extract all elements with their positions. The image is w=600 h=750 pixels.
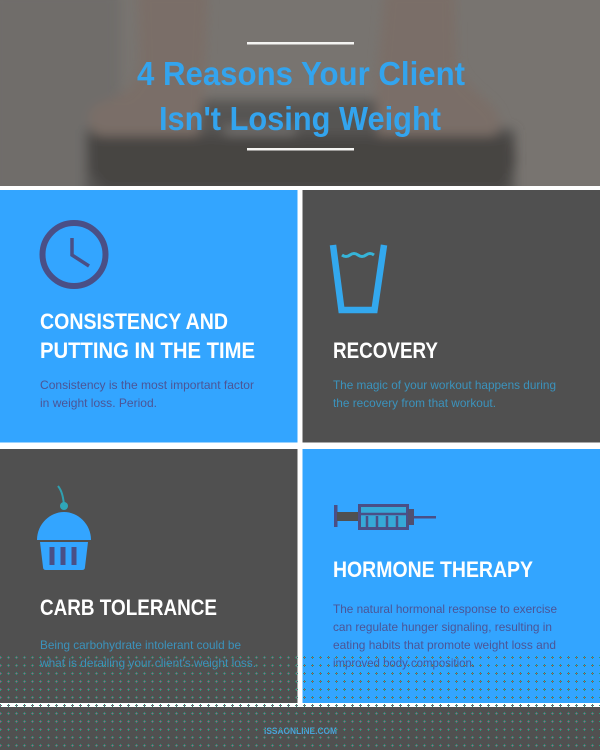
title: Isn't Losing Weight: [159, 100, 441, 137]
text: hormone body: eating habits that promote weight loss and: [333, 638, 556, 652]
panel: consistency: [0, 190, 298, 442]
icon: cupcake: [37, 486, 91, 570]
dot pattern overlay: [0, 656, 600, 750]
heading: consistency: CONSISTENCY AND: [40, 309, 228, 334]
text: hormone body: The natural hormonal response to exercise: [333, 602, 557, 616]
text: hormone body: [333, 602, 557, 670]
text: consistency body: [40, 378, 254, 410]
text: consistency body: Consistency is the most important factor: [40, 378, 254, 392]
header photo: feet on a scale: [0, 0, 600, 200]
header rule bottom: [247, 148, 354, 150]
text: carb body: what is derailing your client's weight loss.: [39, 656, 256, 670]
footer url: ISSAONLINE.COM: [264, 726, 337, 736]
text: recovery body: The magic of your workout happens during: [333, 378, 556, 392]
icon: clock: [42, 223, 106, 286]
panel: carb tolerance: [0, 449, 298, 703]
heading: recovery: RECOVERY: [333, 338, 438, 363]
text: hormone body: improved body composition.: [333, 656, 475, 670]
title: [137, 55, 465, 137]
text: hormone body: can regulate hunger signaling, resulting in: [333, 620, 552, 634]
heading: consistency: PUTTING IN THE TIME: [40, 338, 255, 363]
panel: recovery: [302, 190, 600, 442]
footer band: [0, 707, 600, 750]
text: recovery body: the recovery from that workout.: [333, 396, 496, 410]
text: recovery body: [333, 378, 556, 410]
heading: consistency: [40, 309, 255, 363]
title: 4 Reasons Your Client: [137, 55, 465, 92]
panel: hormone therapy: [302, 449, 600, 703]
text: carb body: Being carbohydrate intolerant could be: [40, 638, 241, 652]
heading: carb tolerance: CARB TOLERANCE: [40, 595, 217, 620]
text: consistency body: in weight loss. Period.: [40, 396, 157, 410]
text: carb body: [39, 638, 256, 670]
heading: hormone therapy: HORMONE THERAPY: [333, 557, 533, 582]
icon: water glass: [333, 245, 384, 310]
icon: syringe: [334, 505, 436, 528]
header rule top: [247, 42, 354, 44]
